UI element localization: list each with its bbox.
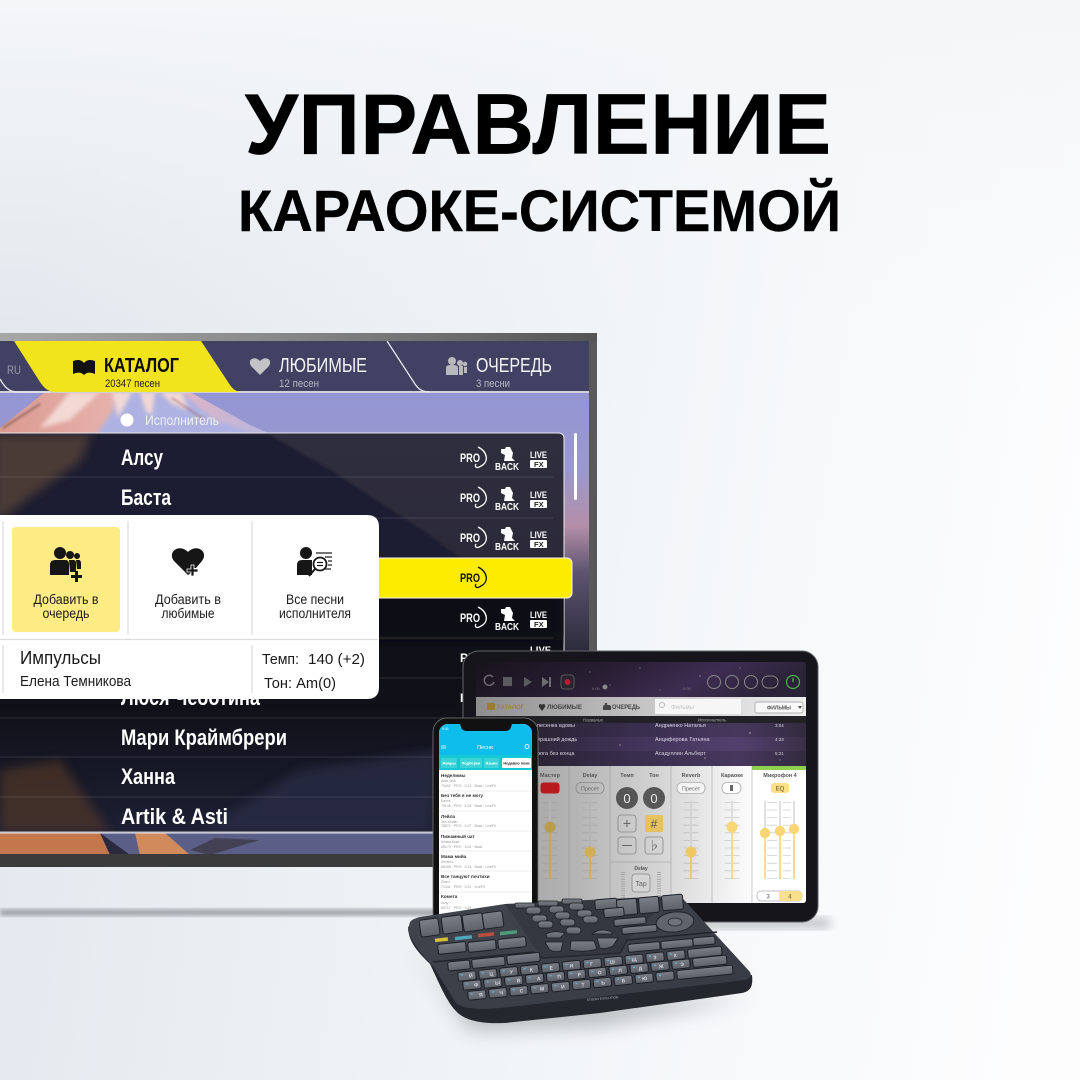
tablet menu bar xyxy=(476,697,806,716)
tempo and key controls: 0 xyxy=(623,791,631,806)
toolbar: 0:00 xyxy=(683,686,692,691)
phone tabs: Недавно поки xyxy=(503,762,530,766)
artist names: Artik & Asti xyxy=(121,804,228,829)
tablet menu bar: ОЧЕРЕДЬ xyxy=(612,705,641,711)
mixer labels xyxy=(540,772,797,778)
row feature icons: FX xyxy=(534,540,544,549)
remote brand text: STUDIO EVOLUTION xyxy=(587,995,619,1002)
tablet menu bar: Фильмы xyxy=(671,705,694,711)
song info: Елена Темникова xyxy=(20,673,132,690)
phone screen: 65170 · PRO · 3:02 · Back xyxy=(441,845,482,849)
remote keyboard row 3: ЯЧСМИТЬБЮ xyxy=(479,974,664,999)
delay tap xyxy=(623,866,659,898)
tab: favourites: 12 песен xyxy=(279,378,319,390)
tempo and key: 140 (+2) xyxy=(308,651,365,668)
phone screen: Jony xyxy=(441,901,449,905)
tempo and key controls: ♭ xyxy=(648,839,660,853)
row feature icons: PRO xyxy=(460,491,480,505)
TV xyxy=(0,333,597,867)
tab: queue: ОЧЕРЕДЬ xyxy=(476,355,552,377)
song info xyxy=(20,648,132,690)
band switch: 4 xyxy=(788,894,792,900)
mixer top buttons: EQ xyxy=(776,786,785,792)
phone song list: Неделимы xyxy=(441,773,465,778)
scrollbar xyxy=(574,433,577,500)
tablet menu bar: ЛЮБИМЫЕ xyxy=(547,705,582,711)
button: add to queue xyxy=(12,527,120,632)
tempo and key controls xyxy=(616,787,665,854)
button: all artist songs: исполнителя xyxy=(279,606,351,621)
remote keyboard row 1: ЙЦУКЕНГШЩЗХ xyxy=(469,949,694,980)
row feature icons: BACK xyxy=(495,461,519,473)
phone tabs xyxy=(441,758,531,768)
phone screen: 69717 · PRO · 3:24 xyxy=(441,906,471,910)
artist names xyxy=(121,445,287,829)
phone screen: Artik, Asti xyxy=(441,779,456,783)
phone song list: Лейла xyxy=(441,813,456,819)
artist names: Мари Краймбрери xyxy=(121,725,287,750)
remote upper right keys xyxy=(595,894,684,934)
mixer labels: Микрофон 4 xyxy=(763,772,798,779)
button: add to queue: Добавить в xyxy=(34,592,98,607)
slider scale ticks xyxy=(550,802,787,880)
TV frame xyxy=(0,333,597,867)
remote special keys xyxy=(448,952,540,971)
tablet screen xyxy=(476,662,806,903)
delay tap: Tap xyxy=(635,881,647,888)
artist names: Люся Чеботина xyxy=(121,685,261,710)
tab: queue xyxy=(446,357,552,387)
remote volume keys xyxy=(419,911,504,937)
song list panel xyxy=(0,433,594,833)
tab: language: RU xyxy=(7,363,21,377)
phone header xyxy=(439,724,532,770)
popup menu xyxy=(0,515,379,699)
row feature icons: LIVE xyxy=(530,490,547,501)
mixer labels: Delay xyxy=(583,773,598,779)
phone song list xyxy=(441,773,490,899)
tab: catalog: 20347 песен xyxy=(105,378,160,390)
song table: Название xyxy=(583,718,603,722)
row feature icons: LIVE xyxy=(530,610,547,621)
toolbar: 0:00 xyxy=(592,686,601,691)
tab: favourites xyxy=(250,358,366,387)
tempo and key xyxy=(262,651,365,692)
button: all artist songs xyxy=(279,547,351,621)
song table: 4:33 xyxy=(775,737,784,742)
selected row xyxy=(379,558,572,598)
phone screen: Serebro xyxy=(441,860,454,864)
title: КАРАОКЕ-СИСТЕМОЙ xyxy=(238,179,841,244)
phone header: 9:41 xyxy=(442,727,449,731)
phone tabs: Подборки xyxy=(462,762,481,766)
remote keyboard row 1 xyxy=(458,946,722,981)
mixer labels: Караоке xyxy=(721,773,743,779)
tab: catalog: КАТАЛОГ xyxy=(104,355,179,377)
row feature icons: PRO xyxy=(460,651,486,665)
band switch: 3 xyxy=(766,894,770,900)
phone screen xyxy=(439,724,532,924)
row feature icons: LIVE xyxy=(530,530,547,541)
phone tabs: Языки xyxy=(485,762,498,766)
song table: 5:21 xyxy=(775,751,784,756)
tempo and key: Темп: xyxy=(262,651,299,668)
remote control xyxy=(408,894,752,1023)
remote body xyxy=(408,896,752,1023)
remote colour keys xyxy=(435,930,517,942)
tab: queue: 3 песни xyxy=(476,378,510,390)
button: add to queue: очередь xyxy=(42,606,90,621)
tempo and key: Тон: Am(0) xyxy=(264,675,336,692)
row feature icons: PRO xyxy=(460,691,486,705)
artist names: Алсу xyxy=(121,445,164,470)
mixer labels: Reverb xyxy=(682,773,701,779)
button: add to favourites xyxy=(155,548,221,621)
phone screen: Клава Кока xyxy=(441,840,459,844)
song table: ерашний дождь xyxy=(537,736,577,743)
phone song list: Без тебя я не могу xyxy=(441,792,484,798)
phone screen: Jah Khalib xyxy=(441,820,457,824)
phone screen: 78871 · PRO · 3:07 · Back · LiveFX xyxy=(441,824,497,828)
phone tabs: Жанры xyxy=(441,762,456,766)
phone body xyxy=(433,718,538,930)
title: УПРАВЛЕНИЕ xyxy=(245,78,831,172)
phone song list: Комета xyxy=(441,894,458,899)
phone song list: Пижамный чат xyxy=(441,833,475,839)
phone screen: Баста xyxy=(441,799,451,803)
band switch xyxy=(757,891,802,901)
mixer top buttons xyxy=(540,782,789,794)
phone song list: Все танцуют почтихи xyxy=(441,874,490,879)
tablet menu bar: ФИЛЬМЫ xyxy=(767,706,791,712)
artist names: Ханна xyxy=(121,764,176,789)
artist names: Баста xyxy=(121,485,172,510)
remote keyboard row 2 xyxy=(463,955,727,990)
song table xyxy=(476,716,806,766)
remote keyboard row 3 xyxy=(468,965,733,1000)
tablet shadow xyxy=(560,918,830,928)
selected row: PRO xyxy=(460,571,480,585)
filter radio: performer: Исполнитель xyxy=(145,412,219,428)
phone header: Песни xyxy=(477,745,493,751)
tempo and key controls: # xyxy=(651,817,658,831)
row feature icons: BACK xyxy=(495,501,519,513)
remote d-pad xyxy=(655,910,695,934)
mixer top buttons: Пресет xyxy=(581,786,600,792)
song table: 3:04 xyxy=(775,723,784,728)
song table: Исполнитель xyxy=(698,718,727,722)
remote shadow xyxy=(415,950,750,1030)
mixer panel xyxy=(538,766,806,903)
filter radio: performer xyxy=(120,414,218,426)
row feature icons: FX xyxy=(534,460,544,469)
floor shadow under TV xyxy=(0,909,440,916)
row feature icons: BACK xyxy=(495,621,519,633)
remote mode keys xyxy=(438,937,526,954)
mixer labels: Тон xyxy=(649,773,659,779)
button: add to favourites: Добавить в xyxy=(155,592,221,607)
tablet body xyxy=(463,651,818,922)
wallpaper: mountain xyxy=(0,393,589,854)
song table: Анциферова Татьяна xyxy=(655,737,711,743)
row feature icons: PRO xyxy=(460,451,480,465)
remote keyboard row 2: ФЫВАПРОЛДЖЭ xyxy=(474,960,701,989)
phone song list: Мама мийа xyxy=(441,853,467,859)
tab: catalog xyxy=(14,341,244,392)
song info: Импульсы xyxy=(20,648,101,668)
button: add to favourites: любимые xyxy=(162,606,214,621)
row feature icons xyxy=(460,447,551,705)
tablet menu bar: КАТАЛОГ xyxy=(497,705,525,711)
row feature icons: PRO xyxy=(460,611,480,625)
sliders xyxy=(550,801,794,879)
phone screen: Zivert xyxy=(441,880,450,884)
mixer top buttons: Пресет xyxy=(682,786,701,792)
row feature icons: LIVE xyxy=(530,450,547,461)
remote numeric pad xyxy=(515,899,598,934)
row feature icons: PRO xyxy=(460,531,480,545)
song table: Асадуллин Альберт xyxy=(655,751,706,757)
slider knobs xyxy=(544,822,799,858)
remote right row keys xyxy=(628,936,715,952)
smartphone xyxy=(433,718,538,930)
row feature icons: FX xyxy=(534,620,544,629)
TV screen xyxy=(0,341,594,855)
song table: Андриенко Наталья xyxy=(655,723,706,729)
song table: песенка вдовы xyxy=(537,723,575,729)
tempo and key controls: + xyxy=(623,815,631,831)
row feature icons: LIVE xyxy=(530,645,551,656)
song table: рога без конца xyxy=(537,751,575,757)
phone screen: 66495 · PRO · 3:14 · Back · LiveFX xyxy=(441,865,497,869)
row feature icons: BACK xyxy=(495,541,519,553)
remote transport keys xyxy=(545,930,618,952)
tempo and key controls: 0 xyxy=(650,791,658,806)
delay tap: Delay xyxy=(634,866,648,872)
button: all artist songs: Все песни xyxy=(286,592,344,607)
mixer labels: Темп xyxy=(620,773,634,779)
tablet xyxy=(463,651,818,922)
mixer labels: Мастер xyxy=(540,773,561,779)
tab bar xyxy=(0,341,589,393)
phone screen: 79135 · PRO · 4:03 · Back · LiveFX xyxy=(441,804,497,808)
row feature icons: FX xyxy=(534,500,544,509)
toolbar xyxy=(476,662,806,698)
title xyxy=(238,78,841,244)
phone screen: 71341 · PRO · 3:21 · LiveFX xyxy=(441,885,486,889)
phone screen: 79402 · PRO · 3:21 · Back · LiveFX xyxy=(441,784,497,788)
tab: favourites: ЛЮБИМЫЕ xyxy=(279,355,367,377)
